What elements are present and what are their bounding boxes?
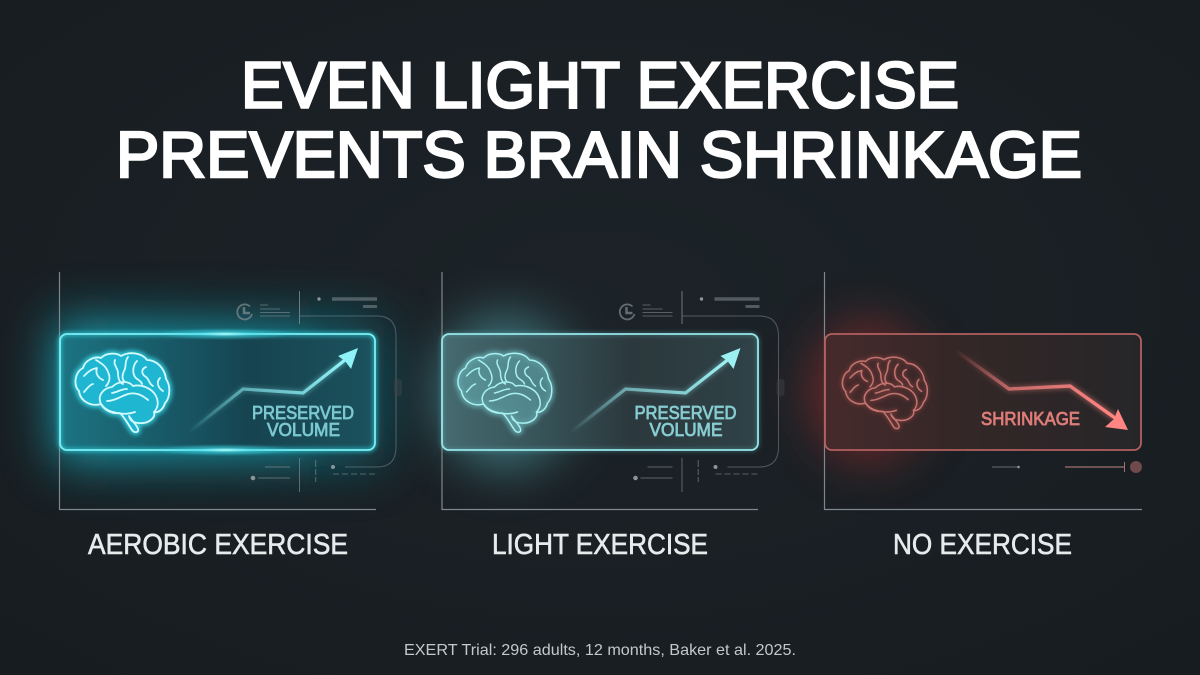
icon: glowing brain [76, 353, 169, 432]
icon: soft glowing brain [458, 353, 552, 432]
arrow: rising trend [188, 348, 358, 433]
chart axes [442, 272, 758, 510]
label: preserved volume: VOLUME [650, 420, 722, 440]
label: preserved volume: PRESERVED [634, 403, 736, 423]
chart axes [60, 272, 376, 510]
arrow: falling trend [955, 350, 1128, 430]
label: preserved volume [634, 403, 736, 440]
glow: red halo [813, 324, 923, 460]
title: EVEN LIGHT EXERCISE [241, 48, 959, 122]
decorative HUD details [237, 291, 402, 492]
panel: no exercise [813, 272, 1142, 510]
decorative details [992, 461, 1142, 473]
decorative HUD details [620, 291, 784, 492]
glow: light panel halo [437, 316, 573, 468]
arrow: rising trend [570, 348, 740, 433]
heading: light exercise: LIGHT EXERCISE [492, 529, 708, 561]
icon: dim brain [842, 357, 927, 429]
panel: aerobic exercise [52, 272, 402, 510]
label: preserved volume [252, 403, 354, 440]
source note: EXERT Trial: 296 adults, 12 months, Baker et al. 2025. [404, 642, 796, 659]
label: shrinkage: SHRINKAGE [981, 409, 1080, 429]
card [442, 334, 758, 450]
title [116, 48, 1082, 191]
heading: no exercise: NO EXERCISE [893, 529, 1072, 561]
card [60, 328, 375, 456]
label: preserved volume: PRESERVED [252, 403, 354, 423]
heading: aerobic exercise: AEROBIC EXERCISE [88, 529, 348, 561]
chart axes [824, 272, 1142, 510]
panel: light exercise [437, 272, 784, 510]
title: PREVENTS BRAIN SHRINKAGE [116, 118, 1082, 191]
glow: aerobic panel halo [52, 318, 384, 466]
card [825, 334, 1141, 450]
label: preserved volume: VOLUME [267, 420, 340, 440]
